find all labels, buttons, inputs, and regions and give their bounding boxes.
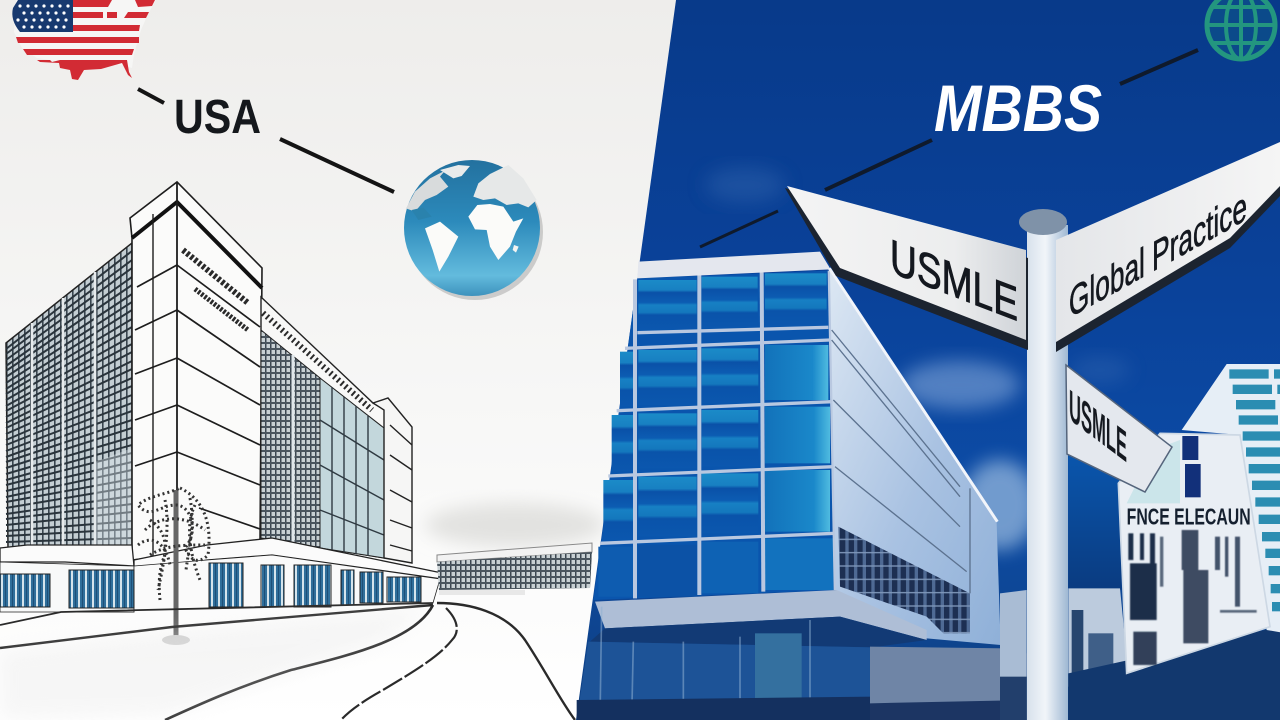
heading: USA: USA xyxy=(174,91,261,144)
sky gap behind block xyxy=(1068,453,1122,590)
slab: white overhang xyxy=(595,590,927,640)
wing: low rear building xyxy=(870,647,1027,720)
signpost: pole xyxy=(1019,209,1068,720)
soffit: shadow under overhang xyxy=(590,617,927,647)
illustration: distant low building xyxy=(437,543,592,595)
illustration: sketched tree xyxy=(138,488,209,645)
tower: central white block xyxy=(130,182,262,560)
ground floor: lower glazing xyxy=(577,607,873,720)
facade: side glass wall xyxy=(829,268,1001,645)
wing: right glass facade xyxy=(261,297,412,563)
illustration: sketched hospital building xyxy=(0,182,592,720)
low building behind pole xyxy=(1000,588,1280,720)
sign: lower USMLE arrow xyxy=(1066,365,1172,492)
lettering: tower sign marks xyxy=(183,250,248,330)
icon: world globe xyxy=(404,160,543,300)
sign: USMLE left arrow xyxy=(785,186,1028,350)
sign: USMLE left arrow: USMLE xyxy=(890,229,1018,332)
sign board xyxy=(1118,433,1270,673)
icon: green globe xyxy=(1207,0,1275,59)
heading: MBBS: MBBS xyxy=(934,71,1102,145)
panel: left sketch background xyxy=(0,0,676,720)
illustration: blue glass building xyxy=(577,252,1027,720)
panel: right blue sky background xyxy=(576,0,1280,720)
connector: USA line xyxy=(138,89,394,192)
sign: lower USMLE arrow: USMLE xyxy=(1069,379,1127,472)
illustration: road lines xyxy=(0,603,575,720)
tall building with teal window strips xyxy=(1182,364,1280,633)
sign noisy artwork xyxy=(1128,530,1257,665)
facade: roof edge xyxy=(637,252,831,278)
canopy: ground floor entrance xyxy=(0,538,442,612)
facade: front glass grid xyxy=(593,271,836,600)
icon: USA flag map xyxy=(12,0,156,80)
texture: ground shading xyxy=(0,610,425,720)
wing: left hatched facade xyxy=(6,243,132,548)
connector: MBBS lines xyxy=(700,50,1198,247)
illustration: right block with sign xyxy=(1000,364,1280,720)
